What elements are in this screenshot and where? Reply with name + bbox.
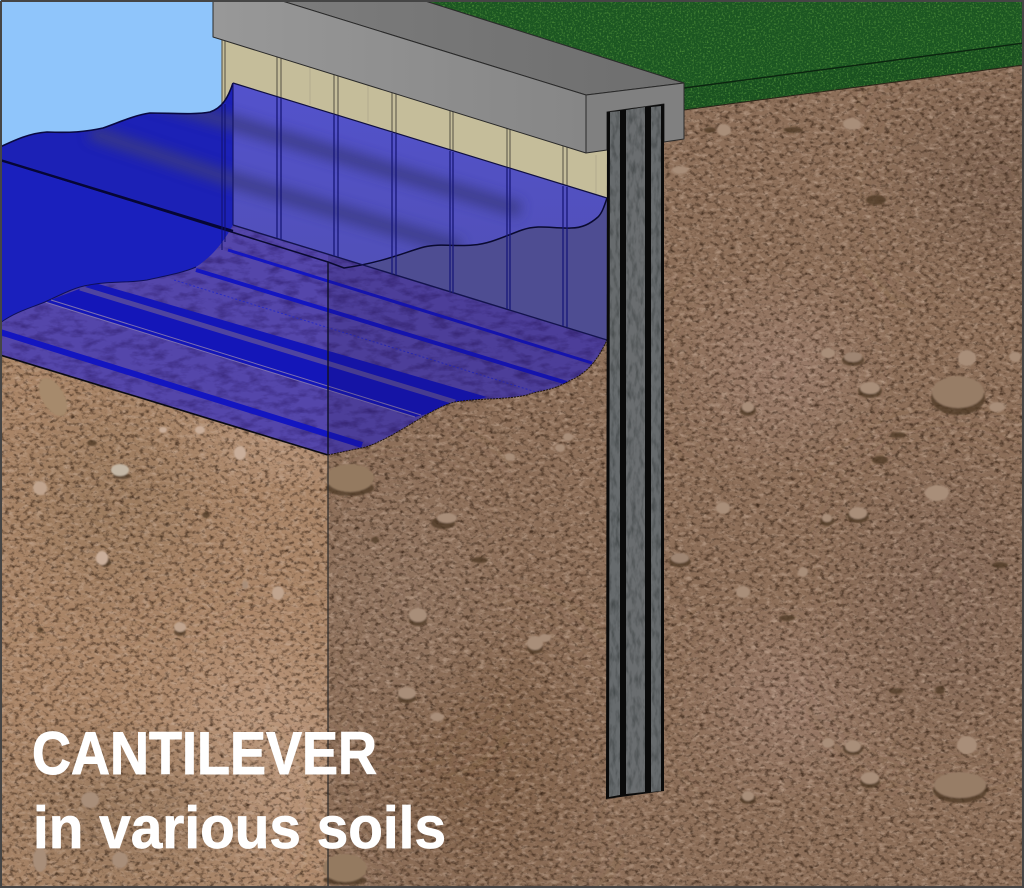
title: CANTILEVER: CANTILEVER xyxy=(32,720,377,787)
water surface on the far wall xyxy=(233,83,607,268)
beam top face xyxy=(279,0,684,95)
submerged wall below the water line xyxy=(233,198,607,340)
beam end face xyxy=(586,83,684,153)
concrete capping beam xyxy=(213,0,684,153)
water reflection bands xyxy=(90,90,520,248)
beam front face xyxy=(213,0,586,153)
submerged floor xyxy=(0,225,608,460)
sheet pile xyxy=(606,104,664,799)
water outline and structural lines xyxy=(0,83,607,888)
sky xyxy=(0,0,222,160)
water body left front xyxy=(0,160,233,323)
grass xyxy=(422,0,1024,110)
retaining wall panels xyxy=(222,30,607,200)
water body left upper xyxy=(0,83,233,231)
subtitle: in various soils: in various soils xyxy=(33,795,446,861)
floor stripes xyxy=(0,250,608,460)
